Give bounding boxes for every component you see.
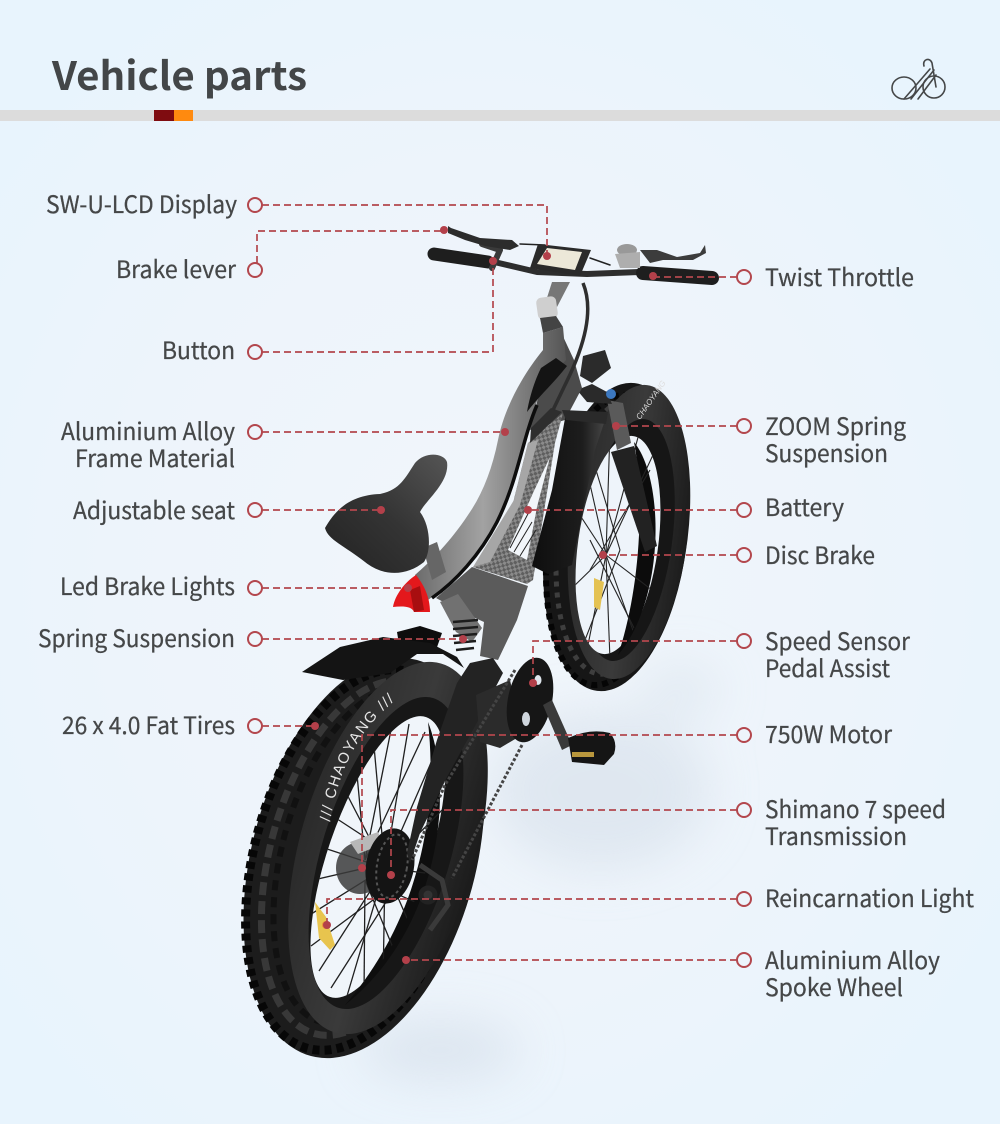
display — [530, 244, 591, 276]
callout: Shimano 7 speed Transmission: Shimano 7 speed — [765, 790, 946, 825]
callout: Button: Button — [162, 331, 235, 366]
callout: Speed Sensor Pedal Assist: Speed Sensor — [765, 622, 911, 657]
callout: Twist Throttle — [649, 258, 914, 293]
callout: Battery: Battery — [765, 488, 844, 523]
cassette — [360, 824, 420, 908]
upper frame joint — [530, 330, 582, 430]
callout: ZOOM Spring Suspension: Suspension — [765, 434, 888, 469]
callout: Reincarnation Light — [323, 879, 974, 929]
callout: 750W Motor — [358, 715, 893, 872]
callout: Aluminium Alloy Frame Material — [61, 412, 509, 474]
right grip — [643, 273, 712, 278]
handlebar — [434, 226, 712, 278]
fork — [577, 384, 657, 552]
tail light — [393, 575, 430, 612]
callout: ZOOM Spring Suspension: ZOOM Spring — [765, 407, 906, 442]
right brake lever — [640, 245, 706, 263]
callout: Aluminium Alloy Frame Material: Frame Material — [75, 439, 235, 474]
chain stay — [407, 658, 503, 863]
carbon panel — [473, 413, 563, 584]
frame — [415, 282, 611, 660]
callout: Brake lever — [116, 226, 448, 285]
icon: bicycle — [892, 59, 945, 99]
callout: Button — [162, 257, 497, 366]
rear wheel — [241, 658, 488, 1058]
callout: Disc Brake — [599, 536, 875, 571]
left brake clamp — [482, 244, 500, 268]
callout: Led Brake Lights — [60, 567, 412, 602]
callout: Led Brake Lights: Led Brake Lights — [60, 567, 235, 602]
front wheel: CHAOYANG — [634, 379, 668, 421]
callout: Shimano 7 speed Transmission — [387, 790, 946, 879]
header — [0, 46, 1000, 121]
front wheel — [542, 380, 690, 692]
fender bracket — [562, 410, 608, 424]
crank and pedal — [543, 700, 615, 765]
derailleur — [420, 865, 448, 930]
title: Vehicle parts — [51, 46, 307, 102]
callout: Aluminium Alloy Spoke Wheel: Aluminium Alloy — [765, 941, 940, 976]
callout: Adjustable seat: Adjustable seat — [73, 491, 235, 526]
brake cables — [520, 244, 610, 265]
callout: 750W Motor: 750W Motor — [765, 715, 893, 750]
header bar — [0, 110, 1000, 121]
rear shock — [453, 620, 478, 650]
callout: Twist Throttle: Twist Throttle — [765, 258, 914, 293]
callout: SW-U-LCD Display: SW-U-LCD Display — [46, 185, 237, 220]
rear mudguard — [302, 626, 464, 680]
reflector — [315, 902, 335, 950]
chainring — [500, 653, 560, 747]
main swoop tube — [415, 327, 566, 600]
lower frame — [436, 567, 528, 660]
seat — [325, 455, 447, 580]
seat stay — [440, 594, 482, 642]
callout: Spring Suspension: Spring Suspension — [38, 619, 235, 654]
stem — [536, 282, 570, 333]
callout: Speed Sensor Pedal Assist — [529, 622, 911, 687]
headlight — [580, 350, 611, 383]
callout: Adjustable seat — [73, 491, 385, 526]
spokes — [308, 724, 448, 996]
callout: Brake lever: Brake lever — [116, 250, 237, 285]
ground shadows — [360, 665, 720, 1080]
cable — [553, 283, 588, 410]
callout: Reincarnation Light: Reincarnation Light — [765, 879, 974, 914]
chain — [412, 670, 522, 878]
motor — [476, 680, 522, 748]
callout: Aluminium Alloy Frame Material: Aluminium Alloy — [61, 412, 235, 447]
hub — [336, 842, 384, 894]
callout: Aluminium Alloy Spoke Wheel: Spoke Wheel — [765, 968, 903, 1003]
left grip — [434, 254, 488, 262]
callout: SW-U-LCD Display — [46, 185, 551, 260]
battery — [532, 413, 604, 574]
callout: ZOOM Spring Suspension — [612, 407, 906, 469]
callout: Disc Brake: Disc Brake — [765, 536, 875, 571]
bicycle illustration — [241, 226, 752, 1058]
callout: Aluminium Alloy Spoke Wheel — [402, 941, 940, 1003]
callout: 26 x 4.0 Fat Tires: 26 x 4.0 Fat Tires — [62, 706, 235, 741]
right switch — [615, 244, 640, 268]
callout: Speed Sensor Pedal Assist: Pedal Assist — [765, 649, 890, 684]
callout: Battery — [524, 488, 844, 523]
left brake lever — [448, 226, 519, 250]
callout: Shimano 7 speed Transmission: Transmission — [765, 817, 907, 852]
tyre lettering: /// CHAOYANG /// — [320, 692, 392, 822]
callout: Spring Suspension — [38, 619, 467, 654]
